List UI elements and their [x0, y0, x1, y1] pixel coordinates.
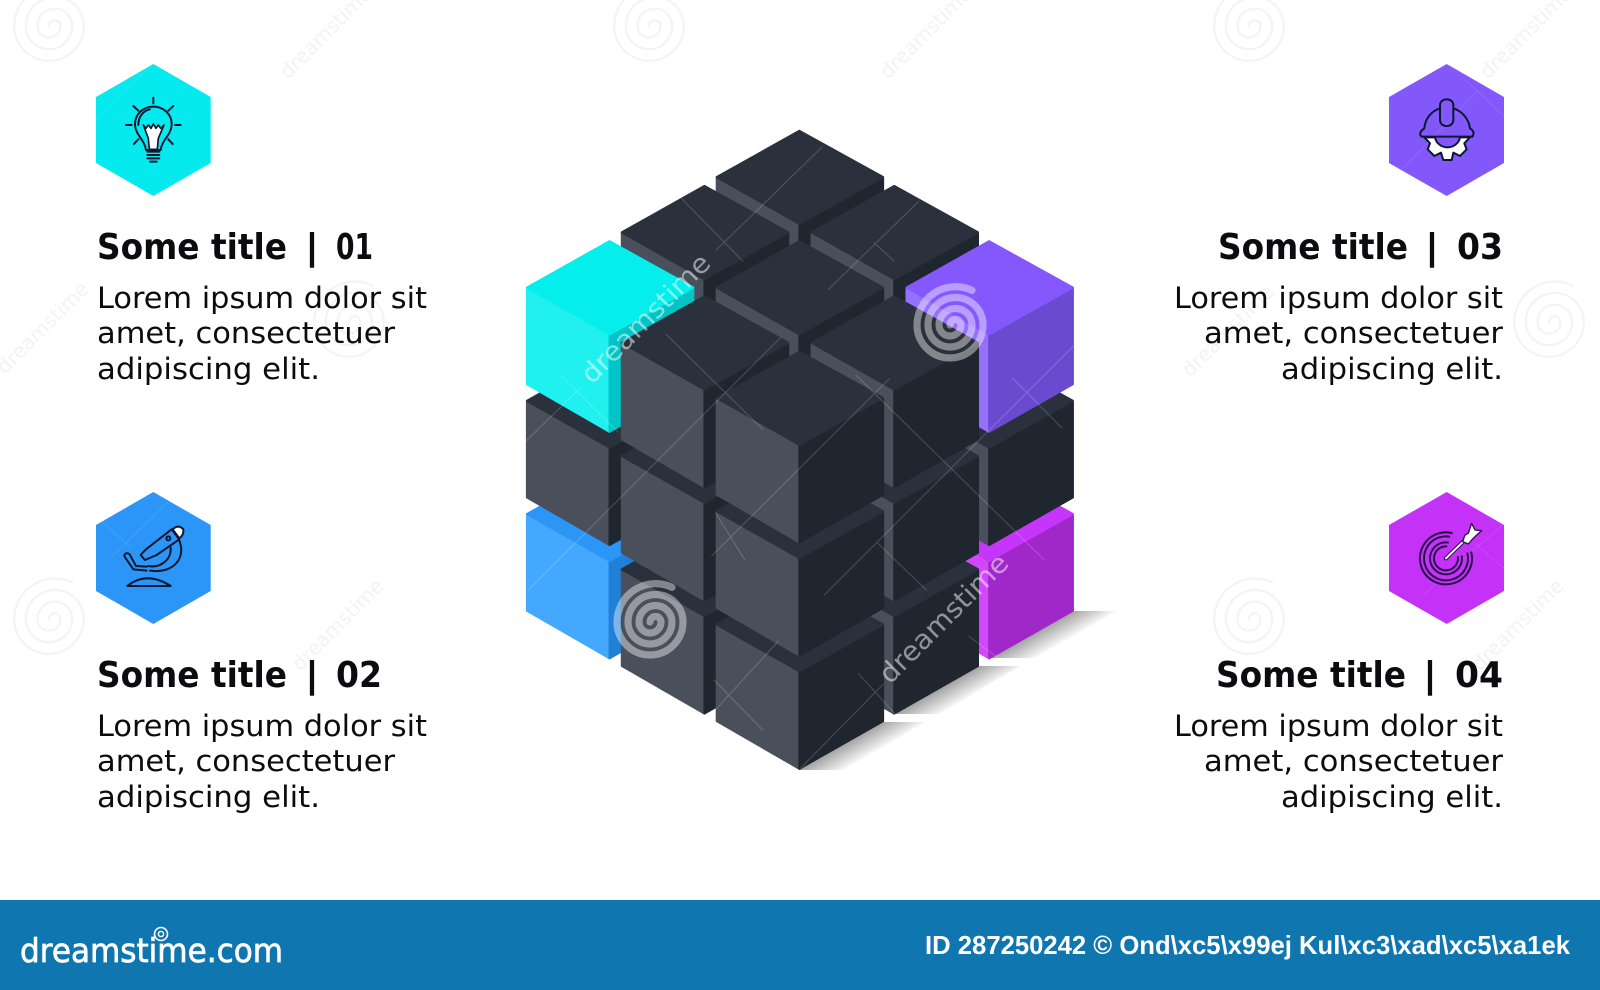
heading: Some title 04: 04 — [1455, 655, 1503, 696]
image credit: ID 287250242 © Ond\xc5\x99ej Kul\xc3\xad\xc5\xa1ek — [925, 930, 1571, 960]
faint background watermarks: dreamstime — [1177, 280, 1278, 382]
cube: magenta bottom right — [906, 468, 1073, 658]
heading: Some title 02: | — [305, 655, 319, 696]
text block: item 01 description: adipiscing elit. — [97, 352, 320, 386]
text block: item 03 description: amet, consectetuer — [1204, 316, 1503, 350]
cube: purple top right — [906, 241, 1073, 432]
cube: cyan top left — [527, 241, 693, 432]
footer banner — [0, 900, 1600, 990]
faint background watermarks — [0, 0, 1584, 676]
text block: item 04 description: adipiscing elit. — [1281, 780, 1503, 814]
watermark overlay on cube: dreamstime — [575, 248, 717, 390]
faint background watermarks: dreamstime — [1467, 574, 1568, 676]
heading: Some title 02: Some title — [97, 655, 287, 696]
text block: item 03 description — [1174, 281, 1503, 386]
heading: Some title 01: 01 — [336, 227, 373, 268]
text block: item 01 description: amet, consectetuer — [97, 316, 395, 350]
middle layer of cubes — [527, 244, 1073, 655]
heading: Some title 02: 02 — [336, 655, 382, 696]
watermark overlay on cube: dreamstime — [873, 548, 1015, 690]
heading: Some title 03: | — [1425, 227, 1439, 268]
heading: Some title 03: Some title — [1218, 227, 1408, 268]
heading: Some title 03: 03 — [1457, 227, 1503, 268]
text block: item 04 description: amet, consectetuer — [1204, 744, 1503, 778]
faint background watermarks: dreamstime — [287, 574, 388, 676]
top layer of cubes — [527, 131, 1073, 542]
text block: item 03 description: adipiscing elit. — [1281, 352, 1503, 386]
panel: item 01 — [96, 64, 427, 386]
icon: light bulb in cyan hexagon — [96, 64, 211, 196]
panel: item 04 — [1174, 492, 1504, 814]
cube: blue bottom left — [527, 468, 693, 658]
text block: item 04 description: Lorem ipsum dolor sit — [1174, 709, 1503, 743]
logo: dreamstime.com: dreamstime.com — [20, 931, 283, 970]
heading: Some title 04: | — [1423, 655, 1437, 696]
bottom layer of cubes — [527, 357, 1073, 769]
text block: item 01 description — [97, 281, 427, 386]
stacked cubes — [526, 131, 1073, 769]
icon: target with arrow in magenta hexagon — [1389, 492, 1504, 624]
heading: Some title 01: Some title — [97, 227, 287, 268]
cube ground shadows — [795, 600, 1117, 770]
panel: item 03 — [1174, 64, 1505, 386]
heading: Some title 01: | — [305, 227, 319, 268]
text block: item 02 description: amet, consectetuer — [97, 744, 395, 778]
icon: helmet and gear in purple hexagon — [1389, 64, 1505, 196]
text block: item 02 description: Lorem ipsum dolor sit — [97, 709, 427, 743]
text block: item 02 description — [97, 709, 427, 814]
heading: Some title 04: Some title — [1216, 655, 1406, 696]
isometric cube chart — [526, 131, 1117, 770]
icon: microscope in blue hexagon — [96, 492, 211, 624]
text block: item 01 description: Lorem ipsum dolor sit — [97, 281, 427, 315]
text block: item 03 description: Lorem ipsum dolor sit — [1174, 281, 1503, 315]
text block: item 04 description — [1174, 709, 1503, 814]
panel: item 02 — [96, 492, 427, 814]
watermark overlay on cube — [575, 248, 1015, 690]
text block: item 02 description: adipiscing elit. — [97, 780, 320, 814]
